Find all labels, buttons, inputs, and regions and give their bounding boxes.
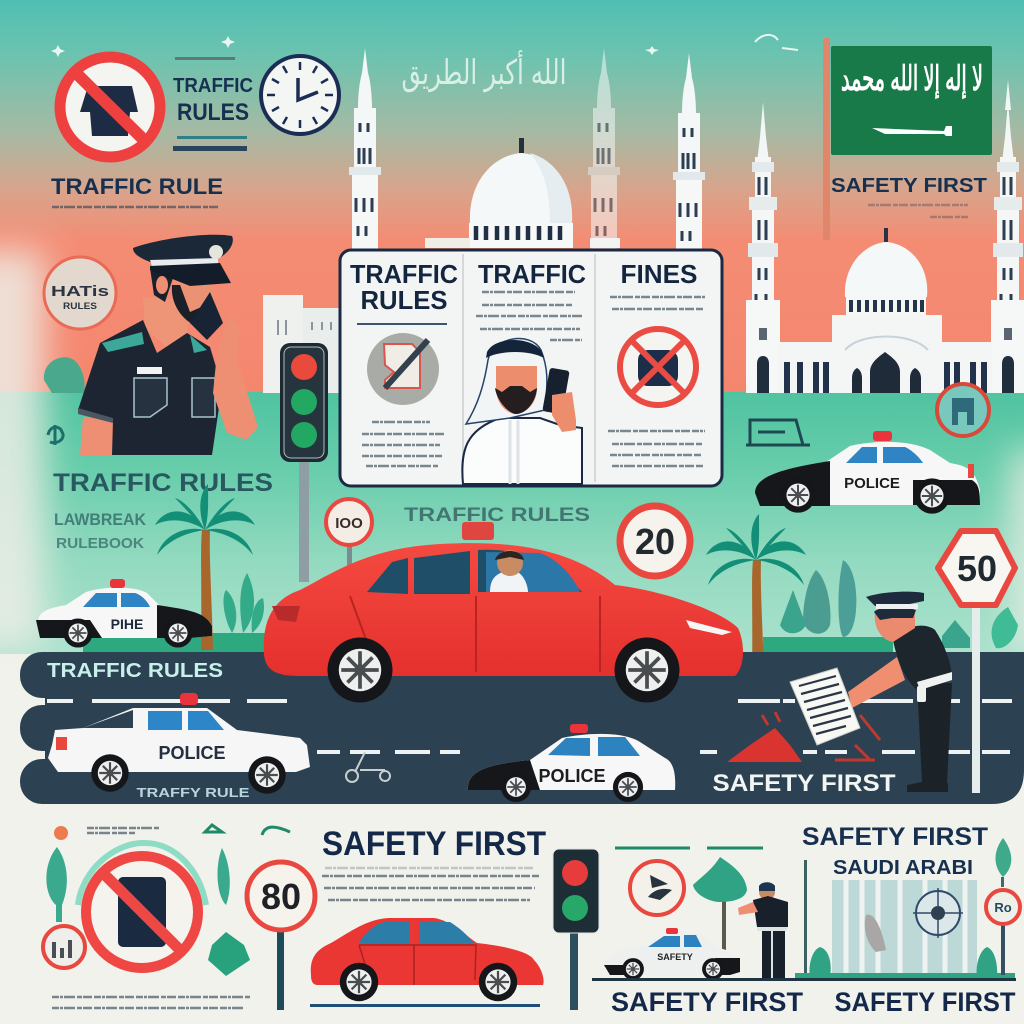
rule lines beside heading xyxy=(173,57,247,151)
police pickup: POLICE xyxy=(158,743,226,763)
mosque skyline: centre xyxy=(349,48,705,255)
blurred text block left xyxy=(54,510,147,552)
police officer writing ticket xyxy=(790,592,952,792)
icon: board car crossed xyxy=(367,333,439,405)
plants and sign right edge: Ro xyxy=(994,900,1012,915)
icon: small green glyph xyxy=(48,425,63,445)
traffic light: large xyxy=(280,343,328,582)
sign: round left: HATis xyxy=(51,283,109,300)
sign: round left xyxy=(44,257,116,329)
caption: traffic rule: TRAFFY RULE xyxy=(136,785,250,800)
caption lines centre xyxy=(322,868,540,900)
Saudi flag xyxy=(823,38,992,240)
heading: traffic rules top: RULES xyxy=(177,99,249,126)
no phone sign bottom xyxy=(78,843,206,968)
speed sign 50 xyxy=(938,531,1015,793)
heading: board traffic rules: TRAFFIC xyxy=(350,259,458,289)
plants left xyxy=(224,573,264,633)
small icons above bottom sign xyxy=(54,825,290,840)
plants and small icons bottom left xyxy=(43,847,250,976)
small scooter xyxy=(346,752,390,782)
palm tree right xyxy=(706,514,806,680)
heading: saudi arabia: SAUDI ARABI xyxy=(833,857,973,879)
heading: board traffic rules: FINES xyxy=(620,259,698,289)
speed sign 50: 50 xyxy=(957,548,997,589)
police car centre: POLICE xyxy=(538,766,606,786)
sign and tree bottom centre right xyxy=(615,848,763,952)
blurred text block left: LAWBREAK xyxy=(54,510,147,529)
sign: speed bottom xyxy=(247,862,315,1010)
icon: clock xyxy=(261,56,339,134)
no phone sign top left xyxy=(60,57,160,157)
sign: small field right xyxy=(937,384,989,436)
arabic calligraphy header: الله أكبر الطريق xyxy=(402,50,566,93)
caption lines bottom left xyxy=(52,997,250,1008)
icon: board no sign right xyxy=(620,329,696,405)
officer small bottom xyxy=(738,882,788,978)
heading: safety first right: SAFETY FIRST xyxy=(802,823,988,851)
man in thobe on phone xyxy=(462,339,582,484)
police officer on phone xyxy=(78,235,258,455)
ground line xyxy=(592,978,1016,981)
small police car bottom xyxy=(604,928,740,980)
sign: speed 20 xyxy=(620,506,690,576)
traffic light bottom xyxy=(553,849,599,1010)
trees right xyxy=(780,560,1018,648)
info board xyxy=(340,250,722,486)
heading: board traffic rules: RULES xyxy=(360,285,448,315)
road xyxy=(20,652,1024,804)
red car bottom xyxy=(310,918,544,1007)
police car centre xyxy=(468,724,675,802)
police car small left xyxy=(36,579,212,648)
police pickup xyxy=(48,693,310,794)
gate panel xyxy=(832,880,977,975)
caption lines top right xyxy=(868,205,968,217)
police car top right xyxy=(755,431,980,514)
small police car bottom: SAFETY xyxy=(657,952,693,962)
police car top right: POLICE xyxy=(844,475,900,492)
red car xyxy=(264,522,743,702)
heading: safety first top right: SAFETY FIRST xyxy=(831,175,987,197)
blurred text block left: RULEBOOK xyxy=(56,535,144,552)
bush behind officer xyxy=(44,357,85,393)
palm tree left xyxy=(155,484,255,650)
heading: safety first bottom left: SAFETY FIRST xyxy=(611,987,803,1017)
heading: board traffic rules xyxy=(350,259,698,315)
underline rule xyxy=(357,323,447,325)
heading: board traffic rules: TRAFFIC xyxy=(478,259,586,289)
sparkles and small marks xyxy=(51,35,798,57)
red debris on road xyxy=(727,712,880,762)
board text lines xyxy=(362,292,705,466)
heading: traffic rules top: TRAFFIC xyxy=(173,75,253,97)
heading: traffic rules left: TRAFFIC RULES xyxy=(53,469,273,497)
mosque skyline: right xyxy=(746,80,1024,393)
sign: small centre: IOO xyxy=(335,515,363,532)
caption line xyxy=(52,206,220,208)
heading: traffic rules on road: TRAFFIC RULES xyxy=(47,660,223,682)
sign: round left: RULES xyxy=(63,301,97,311)
ground strip left xyxy=(83,633,273,653)
heading: safety first on road: SAFETY FIRST xyxy=(712,770,896,797)
heading: traffic rules top xyxy=(173,75,253,126)
sign: speed 20: 20 xyxy=(635,521,675,562)
heading: traffic rule: TRAFFIC RULE xyxy=(51,174,223,199)
heading: safety first bottom right: SAFETY FIRST xyxy=(834,987,1016,1017)
heading: safety first centre: SAFETY FIRST xyxy=(322,825,546,863)
buildings behind officer xyxy=(263,295,339,393)
sign: speed bottom: 80 xyxy=(261,876,301,917)
icon: car outline xyxy=(746,420,810,445)
plants and sign right edge xyxy=(795,838,1020,979)
thin post xyxy=(804,860,807,978)
heading: traffic rules centre: TRAFFIC RULES xyxy=(404,505,590,526)
police car small left: PIHE xyxy=(111,616,143,632)
sign: small centre xyxy=(326,499,372,580)
ground strip right xyxy=(763,637,893,652)
